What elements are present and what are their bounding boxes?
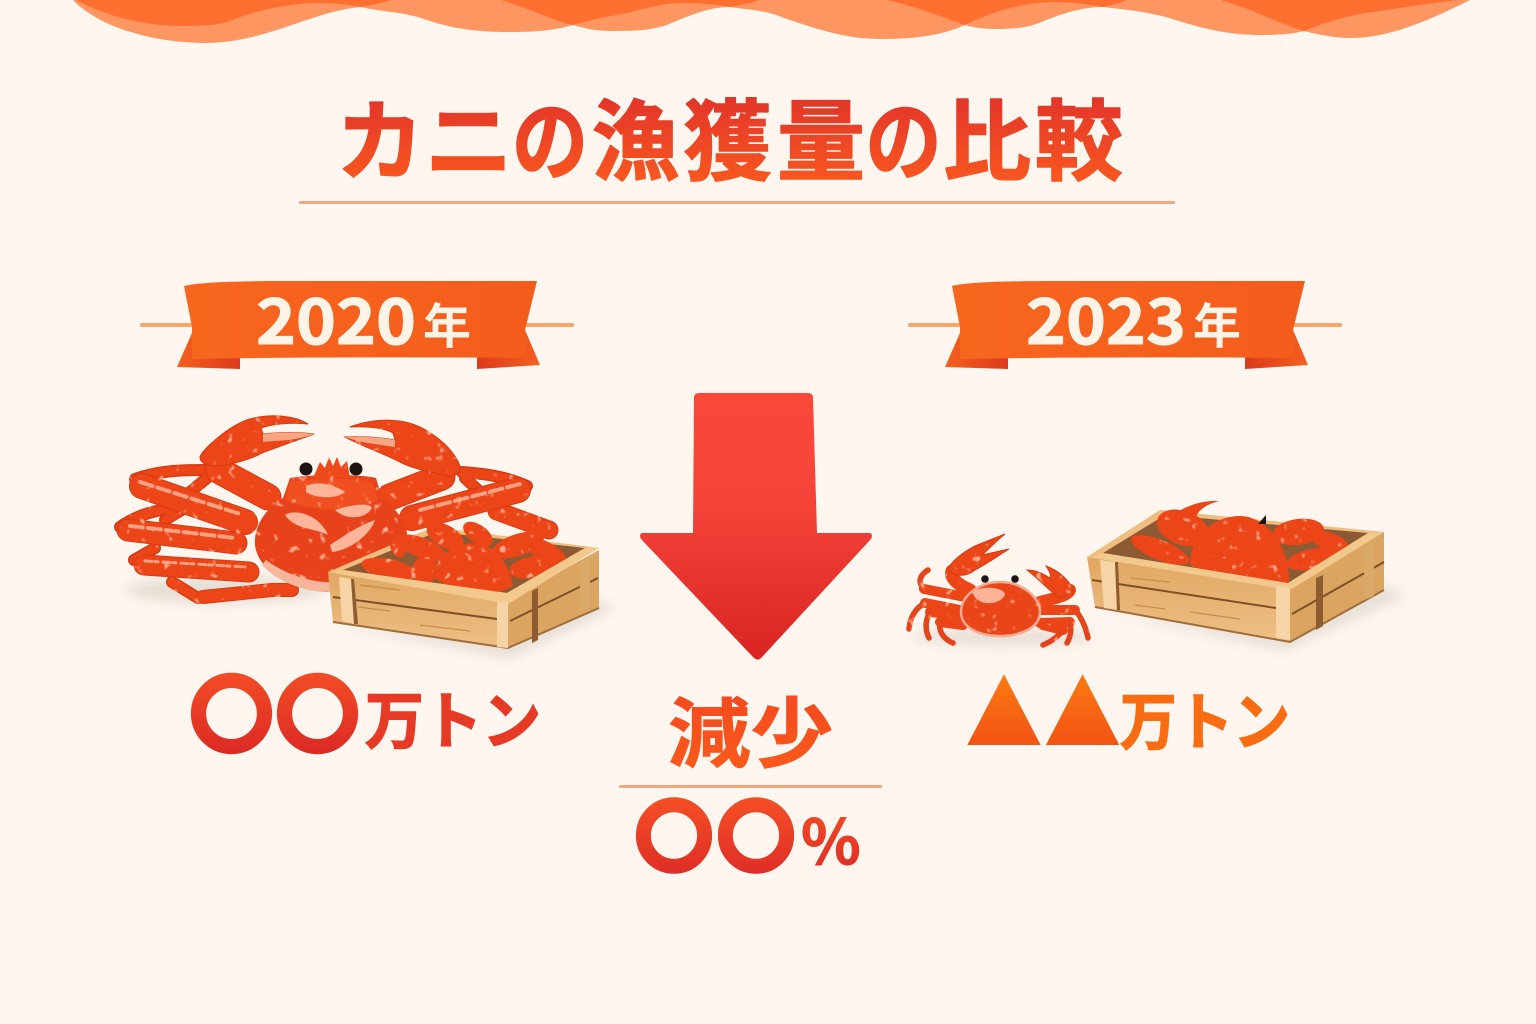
right claw xyxy=(390,477,442,497)
left ribbon tail xyxy=(945,333,1008,369)
small crab body xyxy=(961,582,1040,636)
title: カニ xyxy=(336,72,513,199)
ribbon: 2020 xyxy=(142,272,572,369)
value: 2020 xyxy=(190,649,541,769)
crate with crab xyxy=(1087,501,1384,642)
arrow: decrease xyxy=(640,393,872,660)
title underline xyxy=(299,201,1175,204)
crate rim and interior xyxy=(328,527,599,600)
crate slat grooves and straps xyxy=(333,578,598,621)
ribbon text: 2023 xyxy=(1026,272,1186,362)
unit: 万トン xyxy=(365,671,541,761)
callout: decrease percentage xyxy=(619,673,882,888)
placeholder triangles: ▲ xyxy=(965,646,1043,772)
decrease label: 減少 xyxy=(668,673,833,783)
crate with crab xyxy=(328,517,599,648)
ribbon text: 2020 xyxy=(256,272,416,362)
title xyxy=(336,72,1123,199)
ribbon: 2020: 年 xyxy=(423,287,471,357)
crate front rim xyxy=(328,548,599,604)
crate side face xyxy=(1290,532,1384,642)
shadows xyxy=(125,577,615,658)
crate contents xyxy=(1128,501,1352,583)
rear legs xyxy=(120,470,527,598)
shadows xyxy=(911,586,1405,650)
crab head spikes xyxy=(313,457,350,478)
value: 2023: ▲ xyxy=(1044,646,1122,772)
crate front rim xyxy=(1087,532,1384,590)
ribbon side lines xyxy=(142,323,572,327)
crab carapace xyxy=(255,475,407,592)
title: の xyxy=(866,72,942,199)
right ribbon tail xyxy=(1245,330,1308,369)
walking legs xyxy=(142,486,245,522)
ribbon: 2023 xyxy=(910,272,1340,369)
crate front face xyxy=(328,572,508,648)
callout: decrease percentage: % xyxy=(801,792,861,882)
left claw xyxy=(218,470,268,497)
unit: 万トン xyxy=(1120,672,1290,762)
divider xyxy=(619,785,882,788)
crab eyes xyxy=(300,462,362,476)
crate contents xyxy=(360,517,569,592)
placeholder circles: 〇〇 xyxy=(190,649,359,769)
illustration: small crab and crate (2023) xyxy=(909,501,1405,650)
illustration: large crab and crate (2020) xyxy=(120,416,615,658)
small crab eyes xyxy=(981,575,1019,583)
top wave decoration xyxy=(73,0,1470,43)
small crab claws xyxy=(952,571,970,590)
small crab legs xyxy=(924,589,1075,630)
ribbon side lines xyxy=(910,323,1340,327)
title: の xyxy=(512,72,588,199)
value: 2023 xyxy=(965,646,1290,772)
crate front face xyxy=(1087,557,1290,642)
crab eye in crate xyxy=(1258,515,1266,524)
title: 比較 xyxy=(943,72,1123,199)
crate slat grooves and straps xyxy=(1092,562,1384,614)
ribbon: 2023: 年 xyxy=(1193,287,1241,357)
small crab xyxy=(909,534,1088,645)
title: 漁獲量 xyxy=(592,72,865,199)
carapace highlights xyxy=(285,483,375,552)
ribbon body xyxy=(184,281,537,359)
right ribbon tail xyxy=(477,330,540,369)
crate rim and interior xyxy=(1087,510,1384,585)
large crab xyxy=(120,416,549,598)
left ribbon tail xyxy=(177,333,240,369)
crate side face xyxy=(508,550,599,648)
ribbon body xyxy=(952,281,1305,359)
percentage: 〇〇 xyxy=(636,777,794,888)
